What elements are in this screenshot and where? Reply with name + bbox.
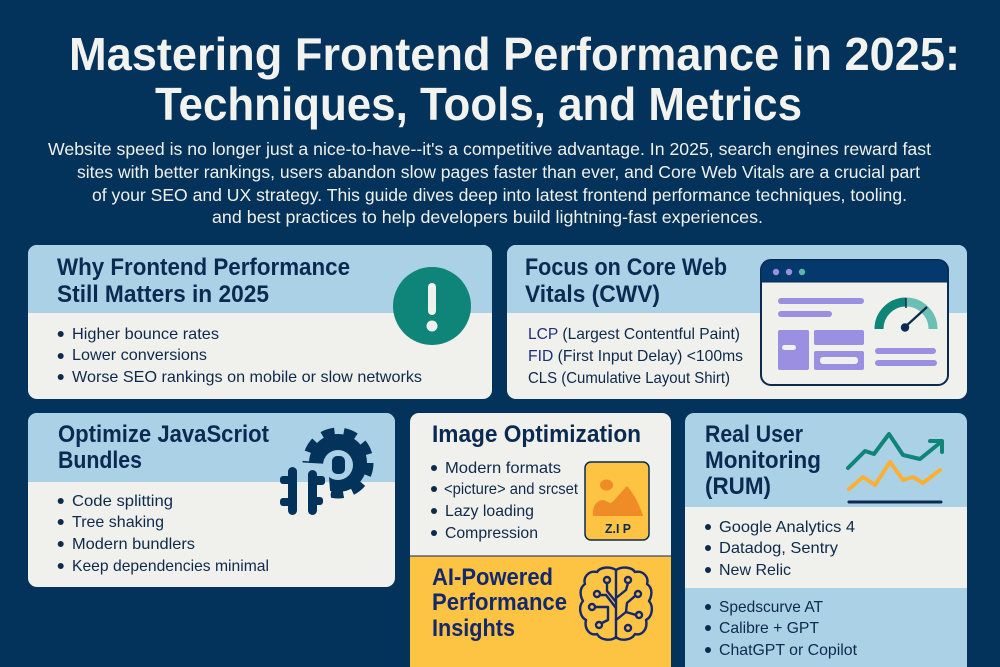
bullet list: consequences: Lower conversions bbox=[72, 347, 207, 364]
bullet list: image techniques: <picture> and srcset bbox=[444, 481, 579, 498]
bullet list: consequences: Higher bounce rates bbox=[72, 326, 219, 343]
bullet list: consequences bbox=[58, 326, 422, 386]
bullet list: image techniques: Modern formats bbox=[445, 460, 561, 477]
panel: why frontend performance matters bbox=[28, 245, 492, 399]
heading: core web vitals: Vitals (CWV) bbox=[525, 281, 660, 308]
heading: ai-powered insights: Insights bbox=[432, 615, 515, 642]
panel: core web vitals bbox=[507, 245, 967, 399]
heading: optimize javascript bbox=[58, 421, 269, 474]
intro paragraph: of your SEO and UX strategy. This guide dives deep into latest frontend performance techniques, tooling. bbox=[92, 185, 907, 205]
heading: why performance matters: Still Matters in 2025 bbox=[57, 281, 269, 308]
panel: real user monitoring bbox=[685, 413, 967, 667]
title: Techniques, Tools, and Metrics bbox=[155, 78, 802, 130]
metric list: FID (First Input Delay) <100ms bbox=[528, 348, 743, 365]
bullet list: image techniques: Compression bbox=[445, 525, 538, 542]
heading: ai-powered insights: AI-Powered bbox=[432, 564, 553, 591]
metric list: CLS (Cumulative Layout Shirt) bbox=[528, 370, 730, 387]
intro paragraph bbox=[48, 139, 931, 227]
panel: optimize javascript bundles bbox=[28, 413, 395, 587]
panel: image optimization bbox=[410, 413, 671, 556]
bullet list: bundling techniques: Tree shaking bbox=[72, 514, 164, 531]
heading: image optimization: Image Optimization bbox=[432, 421, 641, 448]
bullet list: rum tools: New Relic bbox=[719, 562, 791, 579]
bullet list: ai tools: ChatGPT or Copilot bbox=[719, 642, 858, 659]
heading: real user monitoring: Real User bbox=[705, 421, 803, 448]
icon: circuit brain bbox=[580, 568, 652, 640]
heading: ai-powered insights bbox=[432, 564, 567, 642]
heading: real user monitoring: Monitoring bbox=[705, 447, 821, 474]
title bbox=[69, 28, 960, 130]
bullet list: ai tools: Spedscurve AT bbox=[719, 599, 823, 616]
bullet list: bundling techniques: Code splitting bbox=[72, 493, 173, 510]
heading: core web vitals bbox=[525, 254, 727, 308]
heading: optimize javascript: Bundles bbox=[58, 447, 142, 474]
bullet list: ai tools bbox=[705, 599, 858, 659]
bullet list: ai tools: Calibre + GPT bbox=[719, 620, 819, 637]
icon: gear with code fragments bbox=[280, 432, 369, 515]
heading: why performance matters bbox=[57, 254, 350, 308]
heading: real user monitoring bbox=[705, 421, 821, 500]
intro paragraph: and best practices to help developers build lightning-fast experiences. bbox=[212, 207, 763, 227]
heading: why performance matters: Why Frontend Performance bbox=[57, 254, 350, 281]
icon: exclamation badge bbox=[393, 267, 471, 345]
icon: browser dashboard with gauge bbox=[761, 260, 948, 385]
bullet list: image techniques: Lazy loading bbox=[445, 503, 534, 520]
heading: optimize javascript: Optimize JavaScriot bbox=[58, 421, 269, 448]
bullet list: bundling techniques: Keep dependencies minimal bbox=[72, 558, 269, 575]
heading: core web vitals: Focus on Core Web bbox=[525, 254, 727, 281]
bullet list: image techniques bbox=[431, 460, 579, 542]
metric list bbox=[528, 326, 743, 387]
bullet list: rum tools: Google Analytics 4 bbox=[719, 519, 855, 536]
heading: ai-powered insights: Performance bbox=[432, 589, 567, 616]
bullet list: bundling techniques: Modern bundlers bbox=[72, 536, 195, 553]
bullet list: rum tools bbox=[705, 519, 855, 579]
panel: ai-powered performance insights bbox=[410, 556, 671, 667]
bullet list: rum tools: Datadog, Sentry bbox=[719, 540, 838, 557]
title: Mastering Frontend Performance in 2025: bbox=[69, 28, 960, 80]
line chart icon bbox=[848, 434, 942, 502]
intro paragraph: sites with better rankings, users abandon slow pages faster than ever, and Core Web Vitals are a crucial part bbox=[77, 162, 920, 182]
heading: real user monitoring: (RUM) bbox=[705, 473, 771, 500]
bullet list: consequences: Worse SEO rankings on mobile or slow networks bbox=[72, 369, 422, 386]
metric list: LCP (Largest Contentful Paint) bbox=[528, 326, 740, 343]
icon: compressed image file bbox=[585, 462, 649, 540]
icon: compressed image file: Z.I P bbox=[605, 521, 631, 536]
intro paragraph: Website speed is no longer just a nice-to-have--it's a competitive advantage. In 2025, search engines reward fast bbox=[48, 139, 931, 159]
bullet list: bundling techniques bbox=[58, 493, 269, 575]
